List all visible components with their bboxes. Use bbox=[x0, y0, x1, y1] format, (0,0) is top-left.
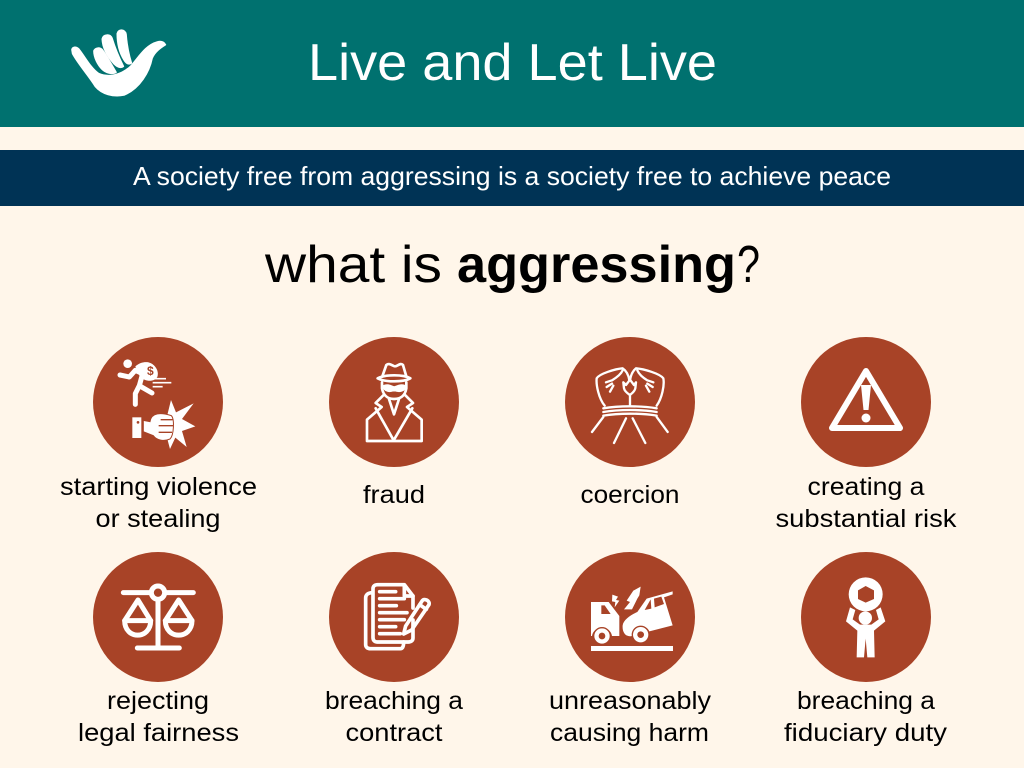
label: rejecting bbox=[107, 687, 209, 715]
icon: bound fists bbox=[592, 368, 668, 443]
label: coercion bbox=[580, 481, 680, 509]
icon: balance scales bbox=[123, 586, 193, 648]
item: breaching a contract bbox=[325, 552, 463, 747]
icon: warning triangle bbox=[832, 371, 900, 428]
label: unreasonably bbox=[549, 687, 712, 715]
icon: car crash bbox=[591, 587, 673, 651]
icon: person lifting a nut bbox=[846, 577, 885, 657]
item: breaching a fiduciary duty bbox=[784, 552, 948, 747]
item: creating a substantial risk bbox=[776, 337, 957, 533]
icon: contract and pen bbox=[366, 585, 429, 649]
label: starting violence bbox=[60, 473, 257, 501]
icon: robber and fist: $ bbox=[147, 364, 154, 378]
heading: ? bbox=[737, 236, 760, 294]
heading: what is bbox=[264, 236, 442, 294]
label: breaching a bbox=[325, 687, 463, 715]
item: breaching a contract: contract bbox=[346, 719, 443, 747]
item: creating a substantial risk: substantial risk bbox=[776, 505, 957, 533]
subtitle banner bbox=[0, 150, 1024, 206]
item: starting violence or stealing bbox=[60, 337, 257, 533]
heading bbox=[264, 236, 760, 294]
icon: shaka hand logo bbox=[72, 30, 165, 96]
icon: spy in trench coat bbox=[367, 364, 422, 441]
label: fraud bbox=[363, 481, 425, 509]
label: breaching a bbox=[797, 687, 935, 715]
subtitle banner: A society free from aggressing is a society free to achieve peace bbox=[133, 161, 891, 191]
item: unreasonably causing harm bbox=[549, 552, 712, 747]
icon: robber and fist bbox=[120, 359, 195, 449]
item: rejecting legal fairness: legal fairness bbox=[78, 719, 239, 747]
label: creating a bbox=[808, 473, 925, 501]
item: breaching a fiduciary duty: fiduciary duty bbox=[784, 719, 948, 747]
heading: aggressing bbox=[457, 236, 736, 294]
item: coercion bbox=[565, 337, 695, 509]
item: rejecting legal fairness bbox=[78, 552, 239, 747]
title: Live and Let Live bbox=[308, 34, 717, 92]
item: fraud bbox=[329, 337, 459, 509]
item: unreasonably causing harm: causing harm bbox=[550, 719, 709, 747]
item: starting violence or stealing: or stealing bbox=[96, 505, 220, 533]
header band bbox=[0, 0, 1024, 127]
